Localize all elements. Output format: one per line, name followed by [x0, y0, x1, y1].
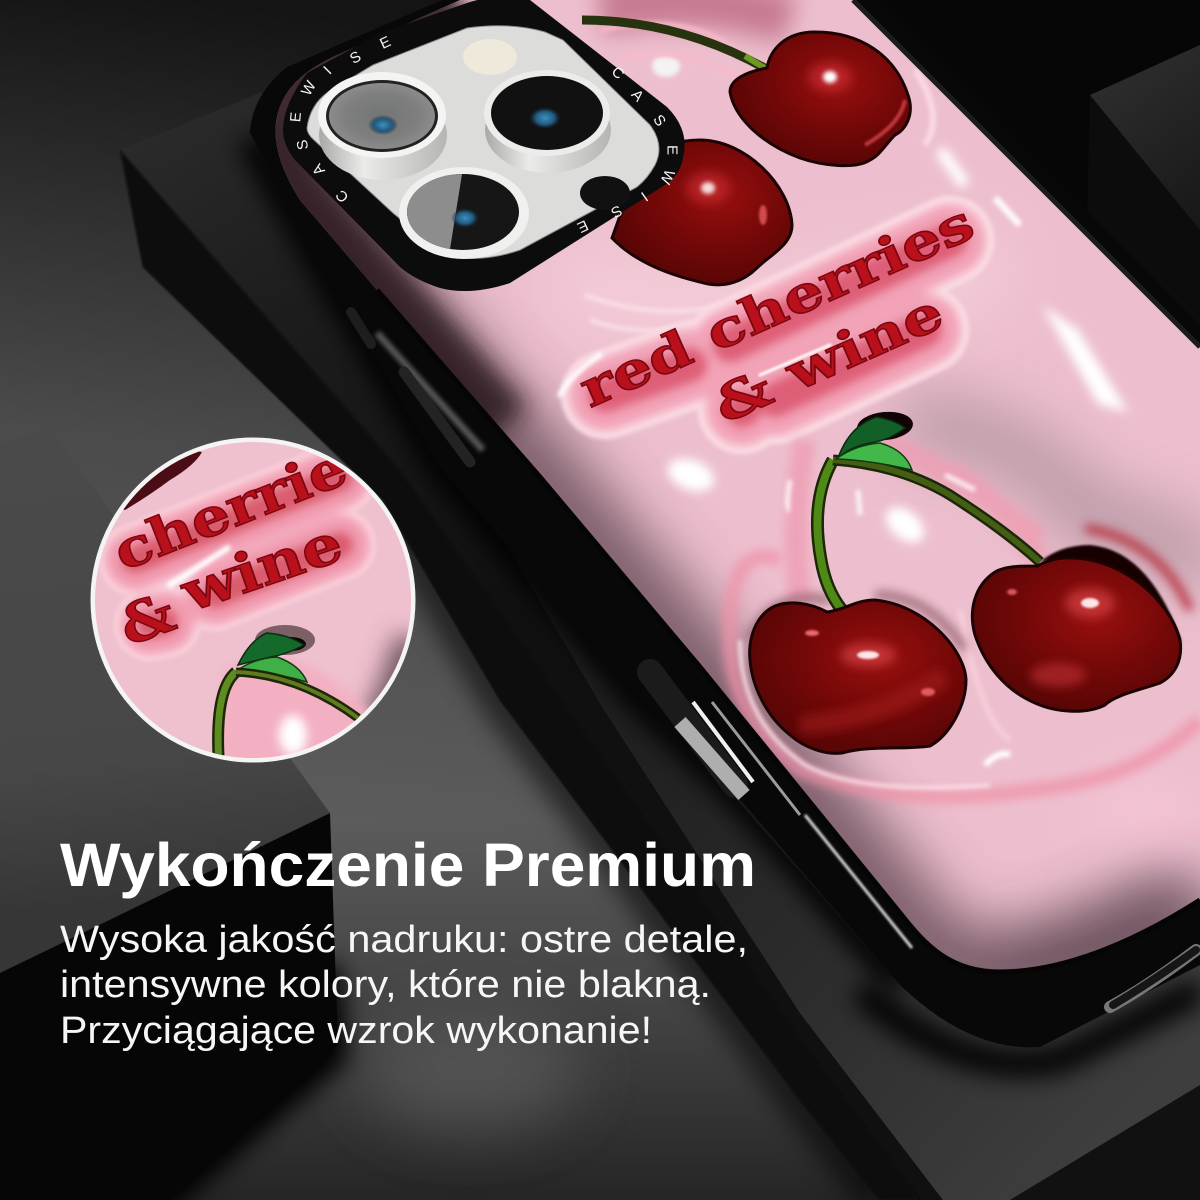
cherry: middle: [612, 140, 792, 285]
case pink back: [276, 0, 1200, 970]
cherry: top: [730, 32, 910, 166]
magnifier surface: [93, 440, 415, 760]
lidar: [580, 176, 630, 210]
magnifier leaf: [236, 625, 315, 682]
stem: top cherry: [582, 20, 768, 70]
lens: right: [484, 70, 611, 173]
magnifier text: wine: [172, 510, 350, 625]
cherry: lower right: [972, 558, 1181, 711]
cherry: lower left: [750, 600, 966, 753]
camera ring: [283, 0, 685, 291]
magnifier stem surface: [224, 660, 370, 758]
flash: [463, 39, 517, 75]
gloss edge highlight upper: [377, 333, 483, 450]
lower left block: [0, 428, 348, 1200]
side button: lower silver: [650, 672, 800, 815]
slogan text: red cherries: [571, 193, 982, 419]
title: Wykończenie Premium: [60, 831, 756, 899]
pink edge shadow: [262, 130, 1200, 974]
side slot: upper: [351, 312, 371, 344]
inner black edge line: [377, 290, 1200, 972]
camera ring brand text: CASEWISECASEWISE: [287, 33, 680, 236]
phone shadow: [250, 140, 900, 985]
description: [60, 919, 748, 1052]
phone case: [250, 0, 1200, 1048]
slogan bubble: [560, 240, 950, 410]
slogan text: & wine: [705, 282, 952, 435]
magnifier stems: [218, 672, 358, 765]
top right dark background: [853, 0, 1200, 450]
side slot: middle: [404, 372, 470, 462]
magnifier text: &: [111, 580, 183, 658]
description: intensywne kolory, które nie blakną.: [60, 964, 711, 1006]
description: Wysoka jakość nadruku: ostre detale,: [60, 919, 748, 961]
description: Przyciągające wzrok wykonanie!: [60, 1010, 652, 1052]
main pedestal block: [120, 92, 943, 1200]
lens: bottom: [399, 167, 529, 259]
magnifier text: cherrie: [105, 437, 356, 583]
magnifier text: [118, 460, 346, 642]
magnifier gloss: [279, 715, 307, 755]
stem gloss: [788, 475, 975, 515]
stem halo: [796, 440, 1040, 600]
case black body: [250, 0, 1200, 1047]
pink shading: [560, 2, 1200, 980]
camera island: [283, 0, 685, 291]
cherry recess: left: [750, 595, 965, 650]
gloss highlights: [585, 24, 1200, 797]
stem end highlight: [745, 56, 768, 70]
gloss edge highlight lower: [805, 815, 912, 948]
dark mauve rim: [276, 0, 500, 430]
stems: lower cherries: [817, 460, 1040, 610]
magnifier callout: [93, 437, 415, 770]
right black edge: [853, 0, 1200, 347]
camera glass plate: [307, 26, 659, 258]
cherry recess: right: [1040, 528, 1190, 645]
charging port: [1110, 950, 1196, 1007]
magnifier shade: [370, 640, 415, 740]
floor lower right: [480, 500, 1200, 1200]
lens: left: [318, 72, 447, 180]
magnifier dark cherry: [124, 452, 202, 510]
leaf: [836, 410, 914, 470]
magnifier halo: [135, 478, 340, 625]
